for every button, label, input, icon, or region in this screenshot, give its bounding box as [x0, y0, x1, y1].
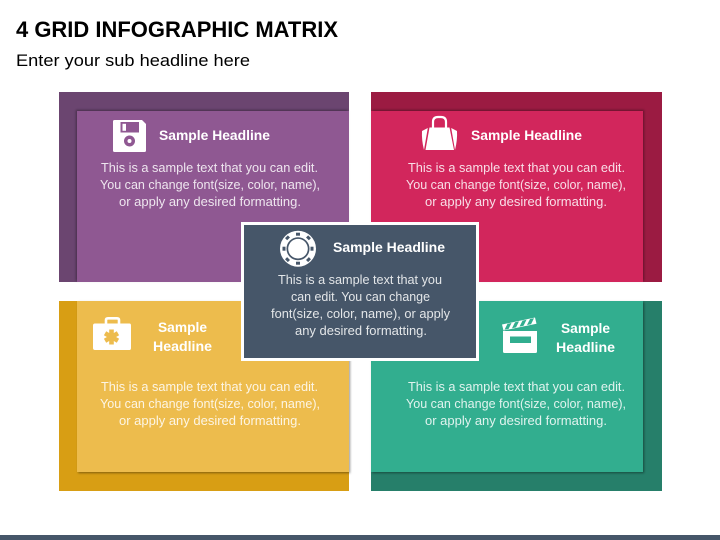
panel: purple [59, 92, 349, 282]
body text: any desired formatting. [295, 324, 427, 338]
body text: You can change font(size, color, name), [100, 178, 320, 192]
body text [406, 161, 626, 209]
panel: red [371, 92, 662, 282]
body text: or apply any desired formatting. [119, 195, 301, 209]
body text: This is a sample text that you can edit. [101, 380, 318, 394]
headline [556, 320, 615, 355]
body text: You can change font(size, color, name), [406, 397, 626, 411]
headline: Sample [561, 320, 610, 336]
headline: Headline [556, 339, 615, 355]
icon: floppy disk [113, 120, 146, 152]
body text: or apply any desired formatting. [119, 414, 301, 428]
body text: This is a sample text that you can edit. [408, 161, 625, 175]
panel: center [242, 224, 478, 360]
body text: or apply any desired formatting. [425, 195, 607, 209]
icon: handbag [422, 117, 457, 150]
panel: yellow [59, 301, 349, 491]
footer bar [0, 535, 720, 540]
body text [100, 161, 320, 209]
body text [100, 380, 320, 428]
subtitle: Enter your sub headline here [16, 51, 250, 70]
body text [406, 380, 626, 428]
headline: Sample [158, 319, 207, 335]
body text: font(size, color, name), or apply [271, 307, 451, 321]
headline: Sample Headline [471, 127, 582, 143]
title: 4 GRID INFOGRAPHIC MATRIX [16, 17, 338, 42]
panel: green [371, 301, 662, 491]
body text [271, 273, 451, 338]
headline: Headline [153, 338, 212, 354]
body text: This is a sample text that you [278, 273, 442, 287]
body text: You can change font(size, color, name), [100, 397, 320, 411]
icon: poker chip [280, 231, 316, 267]
body text: or apply any desired formatting. [425, 414, 607, 428]
body text: can edit. You can change [291, 290, 430, 304]
icon: clapperboard [502, 318, 537, 353]
headline: Sample Headline [159, 127, 270, 143]
headline: Sample Headline [333, 239, 445, 255]
body text: This is a sample text that you can edit. [408, 380, 625, 394]
icon: medical kit [93, 318, 131, 350]
body text: You can change font(size, color, name), [406, 178, 626, 192]
headline [153, 319, 212, 354]
body text: This is a sample text that you can edit. [101, 161, 318, 175]
